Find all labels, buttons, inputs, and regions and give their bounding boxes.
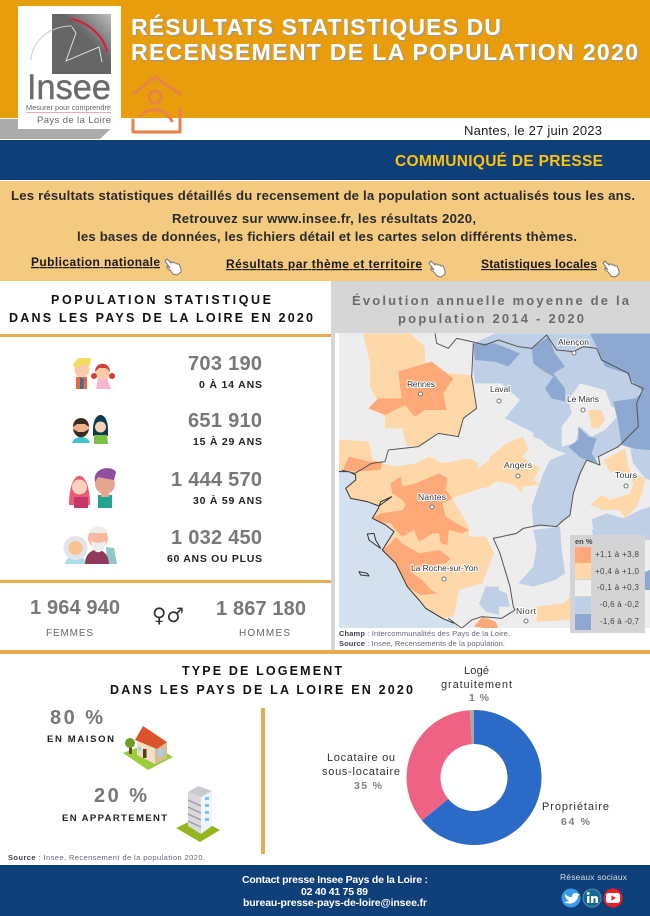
coastline and islands xyxy=(339,472,454,623)
logo: Insee: Insee xyxy=(27,68,111,107)
heading: population: POPULATION STATISTIQUE xyxy=(51,293,271,307)
icon: gender symbols: ♀♂ xyxy=(152,603,184,627)
title: RÉSULTATS STATISTIQUES DU xyxy=(131,13,501,40)
stat: houses: 80 % xyxy=(50,707,103,729)
heading: housing: DANS LES PAYS DE LA LOIRE EN 2020 xyxy=(110,683,413,697)
icon: adults xyxy=(69,468,116,508)
housing source: Source : Insee, Recensement de la population 2020. xyxy=(8,853,205,862)
header grey strip xyxy=(0,119,121,139)
stat: 60 plus: 60 ANS OU PLUS xyxy=(167,553,262,565)
social networks: Réseaux sociaux xyxy=(560,872,628,882)
contact xyxy=(242,874,428,909)
intro text: les bases de données, les fichiers détail et les cartes selon différents thèmes. xyxy=(77,229,577,244)
donut label: tenant: Locataire ou xyxy=(327,752,395,764)
date: Nantes, le 27 juin 2023 xyxy=(464,123,602,138)
links: Résultats par thème et territoire xyxy=(226,257,422,271)
logo: Insee: Pays de la Loire xyxy=(37,115,111,126)
stat: apartments: 20 % xyxy=(94,785,147,807)
map caption: Champ : Intercommunalités des Pays de la Loire. xyxy=(339,629,510,638)
links: Statistiques locales xyxy=(481,257,597,271)
map legend: -1,6 à -0,7 xyxy=(600,617,640,626)
light blue areas xyxy=(473,333,650,463)
icons: pointing hands xyxy=(165,259,619,277)
header band xyxy=(0,0,650,118)
stat: houses xyxy=(47,707,114,745)
map caption xyxy=(339,629,510,648)
stat: men: 1 867 180 xyxy=(216,598,306,620)
stat: apartments: EN APPARTEMENT xyxy=(62,813,167,824)
stat: 30 to 59: 1 444 570 xyxy=(171,469,262,491)
sea xyxy=(339,472,464,633)
press release band: COMMUNIQUÉ DE PRESSE xyxy=(395,153,603,170)
links: Publication nationale xyxy=(31,255,160,269)
icon: apartment building xyxy=(176,786,220,842)
icon: home with person xyxy=(133,77,180,132)
footer xyxy=(0,865,650,916)
donut label: free housing: Logé xyxy=(464,665,489,677)
icon: twitter xyxy=(562,888,580,908)
donut label: tenant: 35 % xyxy=(354,780,383,792)
donut label: owner: Propriétaire xyxy=(542,801,609,813)
stat: 0 to 14: 0 À 14 ANS xyxy=(199,378,262,391)
heading: population: DANS LES PAYS DE LA LOIRE EN 2020 xyxy=(9,311,313,325)
map legend: +0,4 à +1,0 xyxy=(595,567,640,576)
south-east areas xyxy=(490,437,542,493)
icon: seniors xyxy=(64,526,117,564)
logo: Insee: Mesurer pour comprendre xyxy=(26,103,111,112)
stat: women: 1 964 940 xyxy=(30,597,120,619)
stat: 60 plus xyxy=(167,527,262,565)
donut label: tenant: sous-locataire xyxy=(322,766,400,778)
heading: housing xyxy=(110,664,413,697)
panel: map heading: Évolution annuelle moyenne de la xyxy=(352,293,630,308)
region boundary xyxy=(342,333,643,628)
donut label: owner: 64 % xyxy=(561,816,591,828)
stat: 15 to 29: 651 910 xyxy=(188,410,262,432)
icon: children xyxy=(73,358,115,389)
donut label: free housing xyxy=(441,665,512,704)
icon: house xyxy=(123,726,173,770)
stat: 60 plus: 1 032 450 xyxy=(171,527,262,549)
stat: apartments xyxy=(62,785,167,824)
stat: men: HOMMES xyxy=(239,628,290,639)
city labels: Nantes xyxy=(418,492,446,502)
map legend xyxy=(570,535,645,633)
contact: bureau-presse-pays-de-loire@insee.fr xyxy=(243,897,427,909)
city labels xyxy=(407,337,637,623)
map xyxy=(335,333,650,633)
stat: houses: EN MAISON xyxy=(47,734,114,745)
map caption: Source : Insee, Recensements de la population. xyxy=(339,639,505,648)
donut label: free housing: 1 % xyxy=(469,692,490,704)
press release band xyxy=(0,140,650,180)
stat: women xyxy=(30,597,120,639)
stat: 30 to 59 xyxy=(171,469,262,507)
stat: 30 to 59: 30 À 59 ANS xyxy=(193,494,262,507)
heading: housing: TYPE DE LOGEMENT xyxy=(182,664,342,678)
contact: 02 40 41 75 89 xyxy=(301,886,368,898)
donut label: owner xyxy=(542,801,609,828)
stat: 15 to 29: 15 À 29 ANS xyxy=(193,435,262,448)
loire-atlantique and vendee xyxy=(339,440,499,618)
intro text: Les résultats statistiques détaillés du recensement de la population sont actualisés tous les ans. xyxy=(11,188,635,203)
donut chart xyxy=(407,710,542,845)
map legend: en % xyxy=(575,537,593,546)
icon: youtube xyxy=(604,888,622,908)
dark blue areas xyxy=(473,333,650,463)
stat: men xyxy=(216,598,306,639)
map legend: -0,1 à +0,3 xyxy=(597,583,640,592)
icon: linkedin xyxy=(583,889,601,907)
city labels: Laval xyxy=(490,384,510,394)
map legend: -0,6 à -0,2 xyxy=(600,600,640,609)
intro panel xyxy=(0,181,650,281)
stat: 15 to 29 xyxy=(188,410,262,448)
stat: 0 to 14 xyxy=(188,353,262,391)
city labels: Tours xyxy=(615,470,637,480)
stat: 0 to 14: 703 190 xyxy=(188,353,262,375)
city labels: Niort xyxy=(516,606,537,616)
icon: young adults xyxy=(72,415,108,444)
title xyxy=(131,13,638,65)
links xyxy=(31,255,597,271)
title: RECENSEMENT DE LA POPULATION 2020 xyxy=(131,39,638,65)
intro text: Retrouvez sur www.insee.fr, les résultats 2020, xyxy=(172,211,476,226)
city labels: Alençon xyxy=(558,337,589,347)
donut label: tenant xyxy=(322,752,400,792)
map legend: +1,1 à +3,8 xyxy=(595,550,640,559)
panel: map heading: population 2014 - 2020 xyxy=(398,311,584,326)
stat: women: FEMMES xyxy=(46,628,93,639)
Rennes area xyxy=(363,333,477,447)
contact: Contact presse Insee Pays de la Loire : xyxy=(242,874,428,886)
panel: map heading xyxy=(331,281,650,650)
city labels: Rennes xyxy=(407,379,435,389)
city labels: Angers xyxy=(504,460,532,470)
logo: Insee xyxy=(18,6,121,129)
intro text xyxy=(11,188,635,244)
heading: population xyxy=(9,293,313,325)
city labels: Le Mans xyxy=(567,394,599,404)
city labels: La Roche-sur-Yon xyxy=(411,563,478,573)
donut label: free housing: gratuitement xyxy=(441,679,512,691)
